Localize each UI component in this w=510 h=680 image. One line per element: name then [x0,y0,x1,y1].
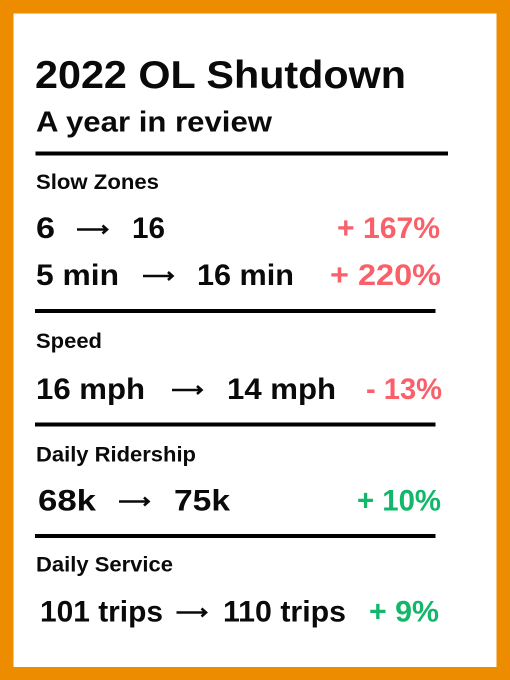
row: slow zone count: 16 [132,212,165,245]
row: service values: 101 trips [40,596,163,628]
row: slow zone minutes: 5 min [36,259,119,292]
row: ridership values: 68k [38,484,96,518]
heading: daily ridership: Daily Ridership [36,444,196,466]
row: slow zone count: 6 [36,212,55,245]
row: ridership values: + 10% [357,484,441,518]
section: daily ridership [36,444,441,518]
row: service values: + 9% [369,596,439,628]
row: speed values [36,373,442,406]
row: ridership values [38,484,441,518]
heading: slow zones: Slow Zones [36,171,159,194]
row: service values: 110 trips [223,596,346,628]
row: speed values: 14 mph [227,373,336,406]
section: speed [36,330,442,406]
row: speed values: 16 mph [36,373,145,406]
row: ridership values: 75k [174,484,230,518]
row: service values [40,596,439,628]
row: slow zone count: + 167% [337,212,440,245]
subtitle: A year in review [36,106,272,138]
heading: daily service: Daily Service [36,554,173,576]
row: slow zone minutes: 16 min [197,259,294,292]
row: slow zone minutes: + 220% [330,259,441,292]
section: slow zones [36,171,441,292]
section: daily service [36,554,439,628]
heading: speed: Speed [36,330,102,353]
title: 2022 OL Shutdown [35,54,406,97]
row: slow zone minutes [36,259,441,292]
row: slow zone count [36,212,440,245]
row: speed values: - 13% [366,373,442,406]
